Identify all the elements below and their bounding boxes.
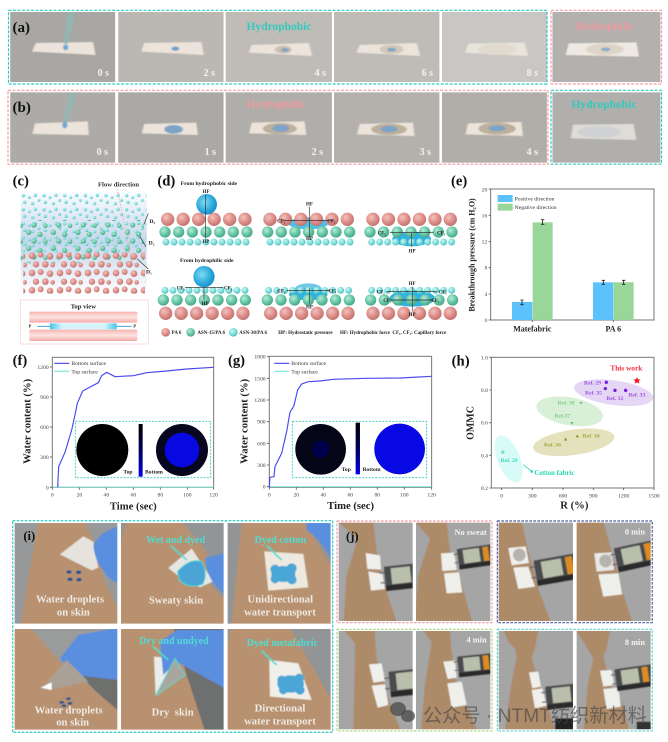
photo: water droplets on skin, cotton: on skin <box>57 607 90 618</box>
panel a: hydrophobic side wetting sequence: 0 s <box>98 68 109 79</box>
panel h: OMMC versus R scatter: 300 <box>528 493 537 499</box>
panel i: wearing photos of cotton and metafabric <box>13 521 333 732</box>
photo pair: 4 min <box>337 629 494 731</box>
panel e: breakthrough pressure bar chart: Matefabric <box>513 324 552 333</box>
panel h: OMMC versus R scatter <box>452 354 660 512</box>
panel g: water content chart: 300 <box>257 463 266 469</box>
panel a: hydrophobic side wetting sequence: 4 s <box>315 68 326 79</box>
panel h: OMMC versus R scatter: This work <box>610 363 643 372</box>
photo: sweaty skin, cotton: Wet and dyed <box>146 535 205 546</box>
top view inset: P <box>133 324 136 329</box>
photo pair: 0 min: 0 min <box>625 527 645 536</box>
panel f: water content chart: (f) <box>13 353 27 369</box>
bottom row: hydrophilic side spheres: CF₂ <box>224 286 233 291</box>
bottom row: hydrophilic side spheres: HP <box>306 305 313 310</box>
wetting image inset f <box>75 421 211 478</box>
panel h: OMMC versus R scatter: Cotton fabric <box>534 469 574 477</box>
wetting image inset f: Bottom <box>145 469 163 475</box>
panel f: water content chart: 0 <box>51 493 54 499</box>
panel h: OMMC versus R scatter: 0.8 <box>481 388 488 394</box>
top row: hydrophobic side spheres: CF₁ <box>327 219 336 224</box>
panel g: water content chart: Water content (%) <box>239 378 250 464</box>
photo: water droplets on skin, metafabric <box>13 628 119 731</box>
photo: dry skin, metafabric: Dry skin <box>152 708 194 719</box>
wetting image inset g <box>292 421 427 478</box>
panel f: water content chart: Bottom surface <box>71 360 107 367</box>
panel b: hydrophilic side wetting sequence: 3 s <box>420 147 431 158</box>
panel e: breakthrough pressure bar chart: 0 <box>484 318 487 324</box>
legend for spheres and forces: ASN-30/PA 6 <box>239 331 268 336</box>
panel h: OMMC versus R scatter: 1500 <box>648 493 660 499</box>
photo: unidirectional transport on cotton: Unidirectional <box>248 595 313 606</box>
panel f: water content chart: 60 <box>130 493 136 499</box>
photo: unidirectional transport on cotton <box>226 522 332 625</box>
panel e: breakthrough pressure bar chart: 16 <box>482 213 487 219</box>
bottom row: hydrophilic side spheres: CF₁ <box>377 290 385 295</box>
panel g: water content chart: 600 <box>257 441 266 447</box>
panel h: OMMC versus R scatter: 600 <box>559 493 567 499</box>
panel f: water content chart: Water content (%) <box>23 378 34 464</box>
bottom row: hydrophilic side spheres: CF₁ <box>431 299 440 304</box>
panel g: water content chart: Time (sec) <box>327 501 375 512</box>
legend for spheres and forces: HF: Hydrophobic force CF₁, CF₂: Capillary force <box>340 331 447 336</box>
photo: water droplets on skin, metafabric: Water droplets <box>35 706 103 717</box>
panel b: hydrophilic side wetting sequence <box>8 90 662 164</box>
panel e: breakthrough pressure bar chart: 4 <box>484 292 487 298</box>
panel h: OMMC versus R scatter: Ref. 29 <box>501 458 518 464</box>
photo: unidirectional transport on cotton: water transport <box>244 607 316 618</box>
bottom row: hydrophilic side spheres: CF₁ <box>383 299 392 304</box>
bottom row: hydrophilic side spheres: HP <box>202 302 209 307</box>
panel e: breakthrough pressure bar chart: 12 <box>482 240 487 246</box>
panel g: water content chart: 120 <box>427 493 436 499</box>
panel f: water content chart: Top surface <box>71 368 98 375</box>
panel c: multilayer fibre schematic: D₁ <box>146 270 152 276</box>
panel h: OMMC versus R scatter: 0 <box>500 493 503 499</box>
panel b: hydrophilic side wetting sequence: Hydrophilic <box>246 99 306 111</box>
panel d: force analysis of droplets: From hydrophilic side <box>180 258 234 264</box>
panel g: water content chart: 20 <box>293 493 299 499</box>
panel g: water content chart: (g) <box>228 353 245 369</box>
photo pair: 8 min <box>497 629 655 731</box>
panel h: OMMC versus R scatter: Ref. 32 <box>606 396 623 402</box>
panel f: water content chart: 20 <box>76 493 82 499</box>
panel e: breakthrough pressure bar chart: 20 <box>482 188 487 194</box>
bottom row: hydrophilic side spheres: CF₂ <box>177 286 185 291</box>
top row: hydrophobic side spheres: HF <box>306 203 313 208</box>
panel a: hydrophobic side wetting sequence: (a) <box>12 20 30 36</box>
panel f: water content chart: 0 <box>46 485 49 491</box>
bottom row: hydrophilic side spheres: HF <box>409 282 416 287</box>
bottom row: hydrophilic side spheres: CF₂ <box>277 289 286 294</box>
panel c: multilayer fibre schematic: D₃ <box>149 219 155 225</box>
photo: sweaty skin, cotton: Sweaty skin <box>149 596 203 607</box>
panel e: breakthrough pressure bar chart: (e) <box>451 174 467 190</box>
panel a: hydrophobic side wetting sequence: 8 s <box>527 68 538 79</box>
panel e: breakthrough pressure bar chart: Negative direction <box>515 205 557 211</box>
panel f: water content chart: 1200 <box>37 365 49 371</box>
panel f: water content chart: 900 <box>40 395 49 401</box>
photo pair: no sweat <box>337 521 495 623</box>
comparison group ellipses <box>489 375 655 486</box>
panel h: OMMC versus R scatter: Ref. 29 <box>584 380 601 386</box>
panel g: water content chart: 60 <box>347 493 353 499</box>
legend for spheres and forces: ASN-15/PA 6 <box>197 331 226 336</box>
top row: hydrophobic side spheres: CF₁ <box>277 219 286 224</box>
panel a: hydrophobic side wetting sequence: 6 s <box>422 68 433 79</box>
photo: unidirectional transport on cotton: Dyed cotton <box>255 535 306 546</box>
panel e: breakthrough pressure bar chart <box>451 174 654 333</box>
panel h: OMMC versus R scatter: Ref. 35 <box>585 390 602 396</box>
photo: sweaty skin, cotton <box>120 522 225 625</box>
legend for spheres and forces <box>161 328 447 337</box>
panel f: water content chart: 40 <box>103 493 109 499</box>
panel h: OMMC versus R scatter: Ref. 34 <box>583 433 600 439</box>
bottom row: hydrophilic side spheres: CF₁ <box>439 290 447 295</box>
bottom row: hydrophilic side spheres <box>158 266 458 320</box>
panel g: water content chart: Top surface <box>291 368 318 375</box>
panel d: force analysis of droplets <box>157 174 458 337</box>
photo pair: 0 min <box>497 521 660 623</box>
panel h: OMMC versus R scatter: R (%) <box>560 501 589 512</box>
layered fibre scatter <box>21 189 147 295</box>
legend for spheres and forces: HP: Hydrostatic pressure <box>278 331 333 336</box>
panel g: water content chart <box>228 353 436 512</box>
wetting image inset f: Top <box>123 469 133 475</box>
photo: dry skin, metafabric <box>120 628 225 731</box>
panel f: water content chart: 100 <box>183 493 192 499</box>
photo: dry skin, metafabric: Dry and undyed <box>139 636 209 647</box>
top row: hydrophobic side spheres: HF <box>203 190 210 195</box>
panel f: water content chart: 600 <box>40 425 49 431</box>
panel e: breakthrough pressure bar chart: PA 6 <box>606 324 621 333</box>
panel f: water content chart <box>13 353 218 513</box>
panel h: OMMC versus R scatter: 900 <box>589 493 598 499</box>
panel h: OMMC versus R scatter: (h) <box>452 354 470 370</box>
panel f: water content chart: 120 <box>209 493 218 499</box>
bottom row: hydrophilic side spheres: HP <box>409 313 416 318</box>
panel g: water content chart: 0 <box>268 493 271 499</box>
legend for spheres and forces: PA 6 <box>172 331 182 336</box>
photo: directional transport on metafabric: Dyed metafabric <box>247 638 318 649</box>
panel g: water content chart: 900 <box>257 420 266 426</box>
panel h: OMMC versus R scatter: Ref. 36 <box>544 442 561 448</box>
panel g: water content chart: 40 <box>320 493 326 499</box>
bottom row: hydrophilic side spheres: CF₁ <box>328 289 337 294</box>
panel g: water content chart: 0 <box>263 485 266 491</box>
panel j: skin temperature and sweat meter photos: (j) <box>346 529 359 543</box>
panel e: breakthrough pressure bar chart: 8 <box>484 266 487 272</box>
panel g: water content chart: 1800 <box>254 354 266 360</box>
photo pair: no sweat: No sweat <box>454 528 487 537</box>
panel h: OMMC versus R scatter: 0.6 <box>481 421 488 427</box>
panel j: skin temperature and sweat meter photos <box>337 521 660 731</box>
panel h: OMMC versus R scatter: 0.2 <box>481 486 488 492</box>
panel a: hydrophobic side wetting sequence <box>8 10 662 84</box>
panel b: hydrophilic side wetting sequence: 1 s <box>205 147 216 158</box>
top row: hydrophobic side spheres: HP <box>409 249 416 254</box>
panel h: OMMC versus R scatter: 1.0 <box>481 355 488 361</box>
panel b: hydrophilic side wetting sequence: Hydrophobic <box>572 99 636 111</box>
panel f: water content chart: Time (sec) <box>110 502 157 513</box>
photo: water droplets on skin, metafabric: on skin <box>56 718 89 729</box>
panel h: OMMC versus R scatter: 1200 <box>618 493 629 499</box>
photo pair: 8 min: 8 min <box>625 638 645 647</box>
panel a: hydrophobic side wetting sequence: Hydrophilic <box>575 21 635 33</box>
photo: water droplets on skin, cotton <box>13 522 119 625</box>
panel b: hydrophilic side wetting sequence: 4 s <box>527 147 538 158</box>
top row: hydrophobic side spheres <box>159 190 458 254</box>
panel e: breakthrough pressure bar chart: Positive direction <box>515 197 555 203</box>
panel h: OMMC versus R scatter: Ref. 38 <box>558 401 575 407</box>
photo: directional transport on metafabric: water transport <box>244 716 316 727</box>
watermark: 公众号 · NTMT纺织新材料 <box>423 705 647 727</box>
panel a: hydrophobic side wetting sequence: Hydrophobic <box>247 21 311 33</box>
panel c: multilayer fibre schematic <box>13 174 155 344</box>
panel f: water content chart: 80 <box>157 493 163 499</box>
wetting image inset g: Top <box>342 467 351 473</box>
top row: hydrophobic side spheres: CF₁ <box>437 232 446 237</box>
panel c: multilayer fibre schematic: D₂ <box>149 240 155 246</box>
panel b: hydrophilic side wetting sequence: 0 s <box>97 147 108 158</box>
panel h: OMMC versus R scatter: 0.4 <box>481 453 488 459</box>
photo: directional transport on metafabric <box>226 628 332 731</box>
panel d: force analysis of droplets: From hydrophobic side <box>181 181 238 187</box>
top view inset <box>21 300 148 344</box>
photo pair: 4 min: 4 min <box>467 635 487 644</box>
panel b: hydrophilic side wetting sequence: (b) <box>12 100 31 116</box>
wetting image inset g: Bottom <box>363 467 381 473</box>
panel h: OMMC versus R scatter: Ref. 33 <box>628 392 645 398</box>
top view inset: P <box>29 324 32 329</box>
panel h: OMMC versus R scatter: OMMC <box>466 406 477 440</box>
top row: hydrophobic side spheres: CF₁ <box>378 232 386 237</box>
panel g: water content chart: 80 <box>374 493 380 499</box>
panel g: water content chart: 1200 <box>254 398 266 404</box>
panel a: hydrophobic side wetting sequence: 2 s <box>204 68 215 79</box>
panel i: wearing photos of cotton and metafabric: (i) <box>23 529 35 543</box>
top view inset: Top view <box>71 304 96 311</box>
top row: hydrophobic side spheres: HP <box>202 240 209 245</box>
panel c: multilayer fibre schematic: (c) <box>13 174 29 190</box>
panel h: OMMC versus R scatter: Ref.37 <box>555 414 570 420</box>
panel e: breakthrough pressure bar chart: Breakthrough pressure (cm H₂O) <box>468 198 477 312</box>
photo: directional transport on metafabric: Directional <box>255 703 305 714</box>
top row: hydrophobic side spheres: HP <box>306 237 313 242</box>
panel f: water content chart: 300 <box>40 455 49 461</box>
panel c: multilayer fibre schematic: Flow direction <box>98 181 139 188</box>
photo: water droplets on skin, cotton: Water droplets <box>36 595 104 606</box>
panel g: water content chart: Bottom surface <box>291 360 327 367</box>
panel b: hydrophilic side wetting sequence: 2 s <box>312 147 323 158</box>
panel g: water content chart: 1500 <box>254 376 266 382</box>
panel d: force analysis of droplets: (d) <box>157 174 175 190</box>
panel g: water content chart: 100 <box>400 493 409 499</box>
